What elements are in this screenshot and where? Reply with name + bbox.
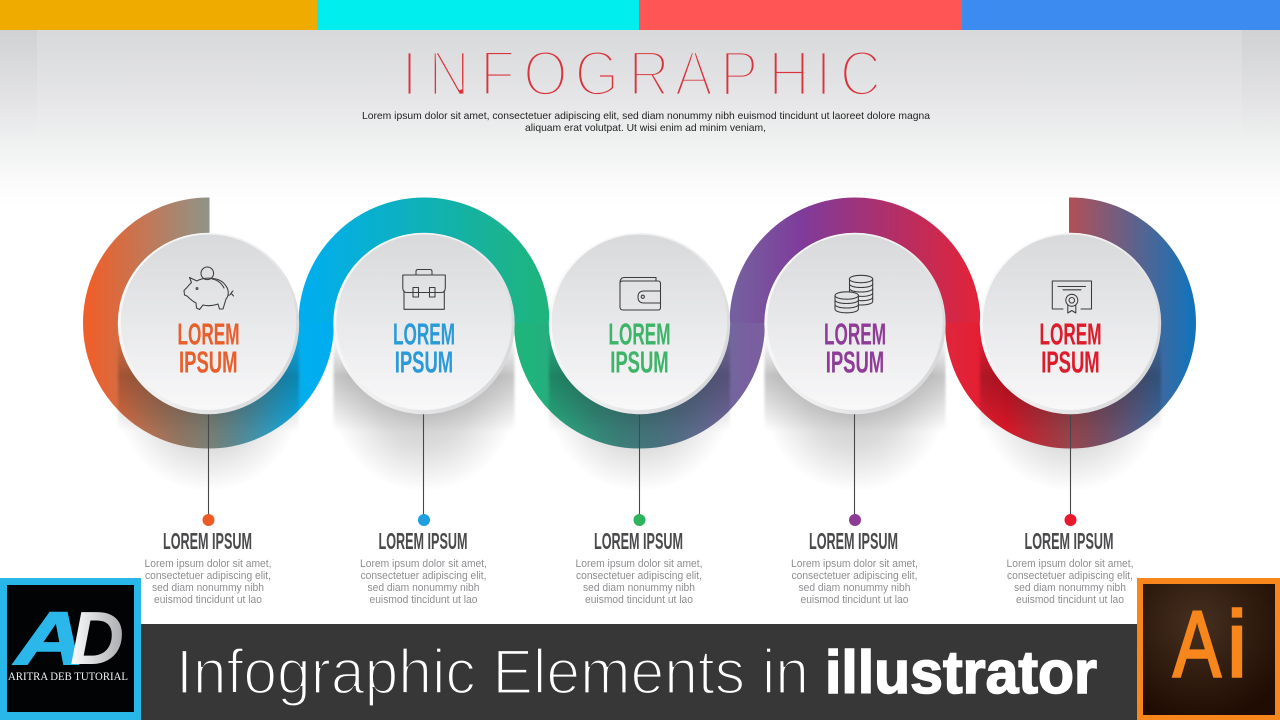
icon: wallet — [620, 278, 660, 310]
step 2 label: LOREM — [393, 318, 455, 352]
caption 4: consectetuer adipiscing elit, — [792, 570, 918, 582]
caption 4: Lorem ipsum dolor sit amet, — [791, 558, 918, 570]
panel: step 2 circle — [333, 233, 515, 414]
caption 5: euismod tincidunt ut lao — [1016, 594, 1124, 606]
title: INFOGRAPHIC — [401, 38, 881, 109]
caption 1: euismod tincidunt ut lao — [154, 594, 262, 606]
step 4 label: IPSUM — [826, 346, 884, 380]
caption 3: euismod tincidunt ut lao — [585, 594, 693, 606]
caption 1 — [144, 514, 272, 606]
Ai letters: i — [1227, 592, 1247, 696]
caption 4: euismod tincidunt ut lao — [800, 594, 909, 606]
logo caption: ARITRA DEB TUTORIAL — [8, 669, 128, 683]
bar title bold: illustrator — [825, 639, 1097, 706]
caption 1: Lorem ipsum dolor sit amet, — [144, 558, 272, 570]
panel: step 5 circle — [980, 233, 1161, 414]
caption 4 — [791, 514, 918, 606]
caption 2: LOREM IPSUM — [378, 528, 468, 554]
top colour bar — [0, 0, 1280, 30]
step 1 label — [178, 318, 240, 380]
caption 3: consectetuer adipiscing elit, — [576, 570, 702, 582]
step 1 label: IPSUM — [179, 346, 238, 380]
icon: briefcase — [403, 270, 445, 309]
caption 3: sed diam nonummy nibh — [583, 582, 695, 594]
top gradient band — [0, 30, 1280, 205]
caption 5: LOREM IPSUM — [1024, 528, 1114, 554]
intro text — [362, 110, 930, 134]
circle cast shadows — [116, 308, 1162, 492]
bar title light: Infographic Elements in — [176, 638, 809, 708]
step 5 label — [1040, 318, 1102, 380]
caption 3: Lorem ipsum dolor sit amet, — [576, 558, 702, 570]
step 5 label: LOREM — [1040, 318, 1102, 352]
icon: coin stacks — [835, 275, 873, 313]
caption 1: LOREM IPSUM — [163, 528, 252, 554]
caption 5: sed diam nonummy nibh — [1014, 582, 1126, 594]
caption 2: sed diam nonummy nibh — [368, 582, 480, 594]
icon: certificate — [1052, 281, 1092, 313]
caption 5 — [1006, 514, 1134, 606]
caption 1: consectetuer adipiscing elit, — [145, 570, 271, 582]
caption 5: Lorem ipsum dolor sit amet, — [1006, 558, 1134, 570]
caption 2: Lorem ipsum dolor sit amet, — [360, 558, 487, 570]
bottom title bar — [141, 624, 1137, 720]
caption 3: LOREM IPSUM — [594, 528, 683, 554]
step 3 label — [608, 318, 670, 380]
caption 5: consectetuer adipiscing elit, — [1007, 570, 1133, 582]
icon: piggy bank — [184, 267, 234, 310]
caption 4: LOREM IPSUM — [809, 528, 898, 554]
logo: AD tutorial — [0, 578, 141, 720]
intro text: aliquam erat volutpat. Ut wisi enim ad minim veniam, — [525, 122, 766, 134]
winding ribbon — [101, 215, 1178, 431]
logo: Adobe Illustrator — [1137, 578, 1280, 720]
step 4 label — [824, 318, 886, 380]
caption 2 — [360, 514, 487, 606]
step 2 label — [393, 318, 455, 380]
step 3 label: IPSUM — [610, 346, 669, 380]
caption 1: sed diam nonummy nibh — [152, 582, 264, 594]
panel: step 3 circle — [549, 233, 730, 414]
intro text: Lorem ipsum dolor sit amet, consectetuer adipiscing elit, sed diam nonummy nibh euismod tincidunt ut laoreet dolore magna — [362, 110, 930, 122]
caption 3 — [576, 514, 702, 606]
connector lines — [208, 414, 1070, 516]
logo letters: A — [12, 596, 85, 680]
Ai letters: A — [1173, 592, 1221, 696]
logo letters: D — [70, 596, 124, 680]
step 2 label: IPSUM — [395, 346, 453, 380]
logo letters — [12, 596, 124, 680]
step 3 label: LOREM — [608, 318, 670, 352]
panel: step 1 circle — [118, 233, 299, 414]
caption 4: sed diam nonummy nibh — [798, 582, 911, 594]
panel: step 4 circle — [764, 233, 946, 414]
caption 2: euismod tincidunt ut lao — [370, 594, 478, 606]
step 4 label: LOREM — [824, 318, 886, 352]
step 5 label: IPSUM — [1041, 346, 1100, 380]
step 1 label: LOREM — [178, 318, 240, 352]
caption 2: consectetuer adipiscing elit, — [360, 570, 486, 582]
